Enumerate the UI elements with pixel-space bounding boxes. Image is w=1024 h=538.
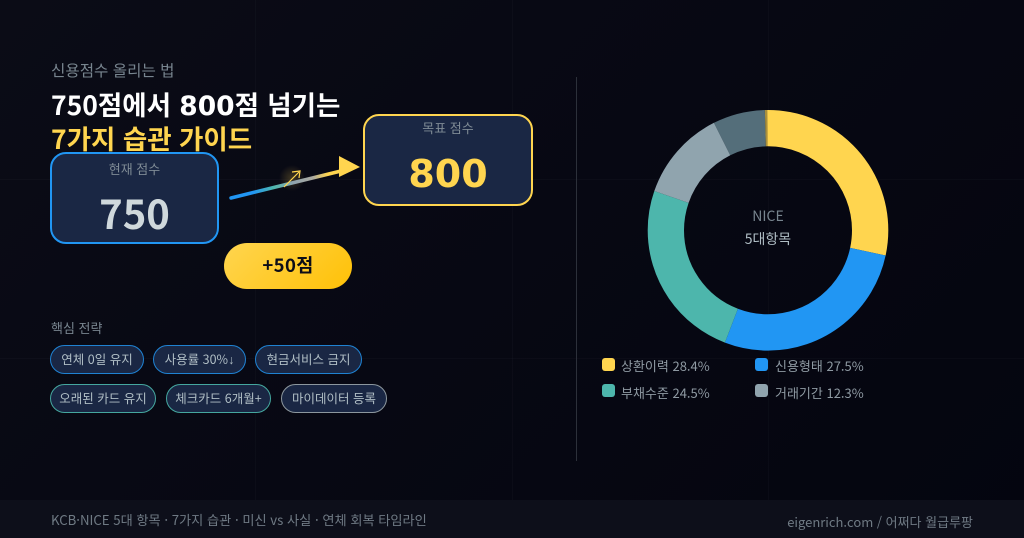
section label: key strategy: 핵심 전략: [51, 318, 102, 337]
chip: 체크카드 6개월+: [175, 388, 262, 407]
chip: 마이데이터 등록: [292, 388, 376, 407]
five factors: 5대항목: [745, 229, 791, 249]
footer bar: [0, 500, 1024, 538]
legend swatch: [755, 358, 768, 371]
chip: [153, 345, 246, 374]
footer topics: KCB·NICE 5대 항목 · 7가지 습관 · 미신 vs 사실 · 연체 회복 타임라인: [51, 510, 427, 529]
badge: +50 points: [224, 243, 352, 289]
NICE: NICE: [752, 206, 784, 226]
eyebrow heading: 신용점수 올리는 법: [51, 59, 175, 81]
arrow: current to target: [229, 156, 360, 200]
target score label: 목표 점수: [422, 118, 474, 137]
chip: 연체 0일 유지: [61, 349, 133, 368]
legend label: 상환이력 28.4%: [621, 356, 710, 375]
title: [51, 84, 340, 157]
chip: 사용률 30%↓: [165, 349, 234, 368]
legend label: 신용형태 27.5%: [775, 356, 864, 375]
donut chart: [648, 110, 888, 351]
title: 7가지 습관 가이드: [51, 118, 252, 157]
chip: [166, 384, 271, 413]
legend swatch: [755, 384, 768, 397]
panel: target score: [363, 114, 533, 206]
chip: [255, 345, 362, 374]
badge: +50 points: +50점: [262, 252, 314, 278]
donut center label: [745, 206, 791, 249]
icon: small up arrow: [284, 171, 300, 187]
target score value: 800: [408, 152, 488, 196]
title: 750점에서 800점 넘기는: [51, 84, 340, 123]
legend swatch: [602, 358, 615, 371]
legend swatch: [602, 384, 615, 397]
legend label: 거래기간 12.3%: [775, 383, 864, 402]
chip: 오래된 카드 유지: [59, 388, 147, 407]
legend: [602, 356, 864, 402]
footer source: eigenrich.com / 어쩌다 월급루팡: [787, 512, 973, 531]
chip: [50, 345, 144, 374]
panel: current score: [50, 152, 219, 244]
current score value: 750: [99, 183, 170, 241]
chip: [281, 384, 387, 413]
chip: [50, 384, 156, 413]
legend label: 부채수준 24.5%: [621, 383, 710, 402]
current score label: 현재 점수: [109, 159, 160, 178]
strategy chips: [50, 345, 387, 413]
chip: 현금서비스 금지: [266, 349, 350, 368]
